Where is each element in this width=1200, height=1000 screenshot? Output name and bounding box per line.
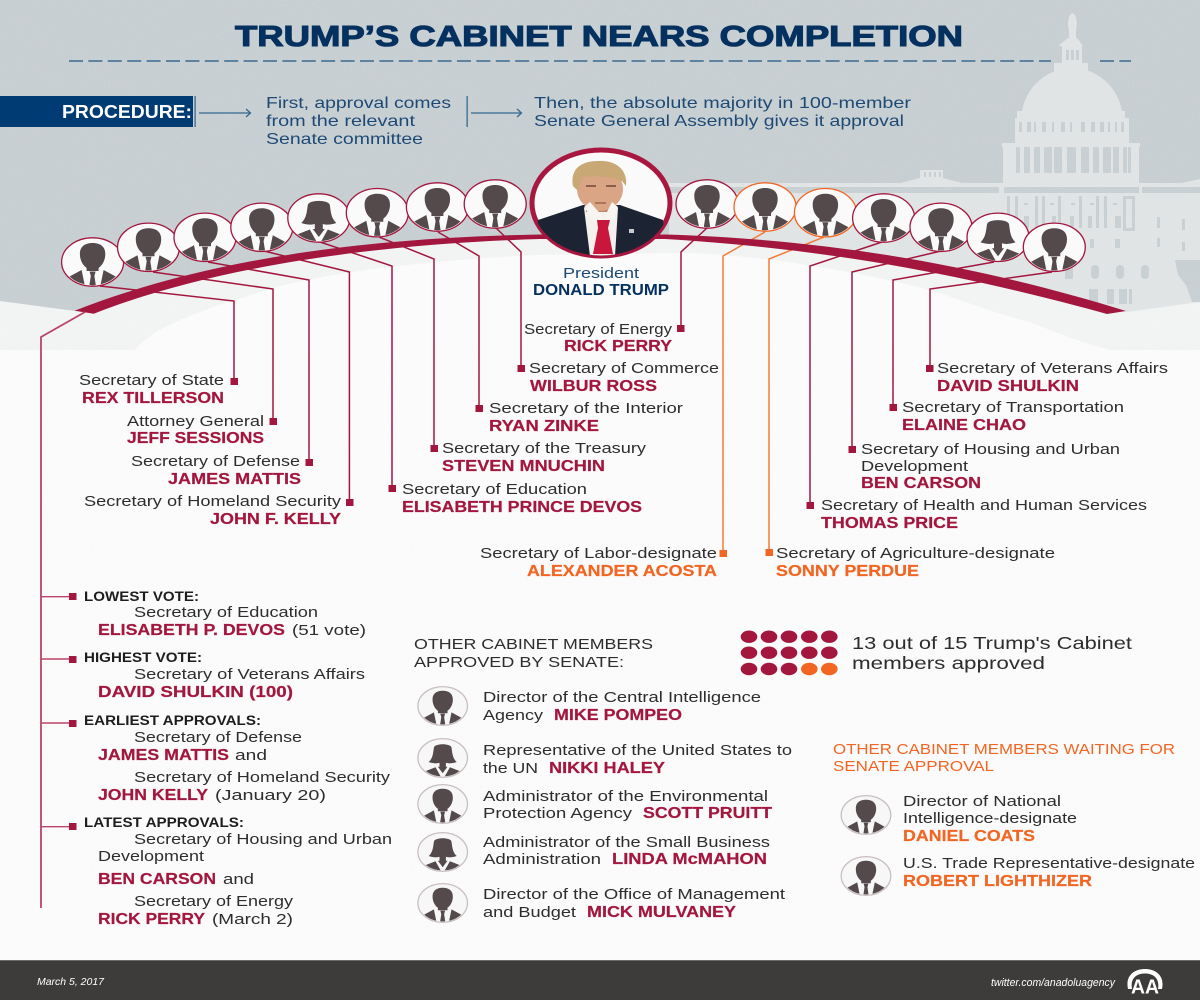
highlight: earliest approvals: (January 20) [215, 787, 326, 804]
label: Zinke: RYAN ZINKE [489, 418, 599, 435]
highlight: lowest vote: LOWEST VOTE: [84, 589, 199, 604]
highlight: latest approvals: Secretary of Energy [134, 893, 294, 910]
avatar: Sessions [116, 223, 180, 272]
president label: DONALD TRUMP [533, 282, 669, 299]
label: Price: Secretary of Health and Human Services [821, 497, 1147, 514]
avatar: Chao [966, 213, 1030, 262]
title: TRUMP’S CABINET NEARS COMPLETION [235, 21, 963, 53]
arc [75, 234, 1126, 314]
connector lines: left members [100, 228, 521, 502]
capitol building [669, 13, 1200, 313]
highlight: lowest vote: (51 vote) [292, 622, 366, 639]
highlight: earliest approvals: Secretary of Defense [134, 729, 302, 746]
member: Pompeo: Director of the Central Intelligence [483, 689, 761, 706]
heading: other approved members: APPROVED BY SENATE: [414, 654, 624, 671]
background: hill layers [0, 236, 1200, 1000]
text: first step [266, 95, 451, 148]
text: second step [534, 95, 912, 130]
label: Perry [524, 321, 684, 355]
label: Kelly [84, 493, 354, 528]
label: Ross: Secretary of Commerce [529, 360, 719, 377]
label: Chao [890, 399, 1124, 434]
member: Lighthizer: ROBERT LIGHTHIZER [903, 873, 1092, 890]
label: Perdue: Secretary of Agriculture-designate [776, 545, 1055, 562]
member: Mulvaney [417, 884, 786, 923]
label: Mattis: Secretary of Defense [131, 453, 300, 470]
member: McMahon: LINDA McMAHON [612, 851, 767, 868]
member: Pompeo: MIKE POMPEO [554, 707, 682, 724]
footer [0, 960, 1200, 1000]
member: Lighthizer [840, 855, 1195, 896]
label: Shulkin: DAVID SHULKIN [937, 378, 1079, 395]
text: approval count [852, 633, 1132, 673]
avatar: Zinke [405, 183, 469, 232]
highlight: earliest approvals: Secretary of Homeland Security [134, 769, 391, 786]
label: DeVos: ELISABETH PRINCE DEVOS [402, 499, 642, 516]
label: Carson: Secretary of Housing and Urban [861, 441, 1120, 458]
label: Ross: WILBUR ROSS [530, 378, 657, 395]
label: Shulkin: Secretary of Veterans Affairs [937, 360, 1168, 377]
avatar: Mnuchin [345, 188, 409, 238]
label: Sessions: JEFF SESSIONS [127, 430, 264, 447]
text: first step: First, approval comes [266, 95, 451, 112]
highlight: highest vote [84, 650, 365, 701]
label: DeVos [388, 481, 642, 516]
member: McMahon [417, 833, 770, 872]
label: Mattis: JAMES MATTIS [168, 471, 301, 488]
label: Shulkin [926, 360, 1168, 395]
label: Perry: RICK PERRY [564, 338, 673, 355]
avatar: Price [852, 194, 916, 243]
background: grain texture [0, 0, 1200, 340]
procedure banner [0, 96, 196, 127]
label: Sessions [127, 413, 277, 447]
highlight: latest approvals: Secretary of Housing and Urban [134, 831, 392, 848]
member: Lighthizer: U.S. Trade Representative-designate [903, 855, 1195, 872]
member: Haley: the UN [483, 760, 538, 777]
label: Kelly: JOHN F. KELLY [210, 511, 342, 528]
highlight: earliest approvals: JAMES MATTIS [98, 747, 229, 764]
highlight: highest vote: Secretary of Veterans Affairs [134, 666, 365, 683]
avatar: Carson [909, 203, 973, 252]
highlight: highest vote: DAVID SHULKIN (100) [98, 684, 293, 701]
highlight: latest approvals: and [223, 871, 254, 888]
member: McMahon: Administration [483, 851, 601, 868]
highlight: latest approvals: BEN CARSON [98, 871, 216, 888]
label: Price: THOMAS PRICE [821, 515, 958, 532]
member: Mulvaney: and Budget [483, 904, 577, 921]
label: Mnuchin: Secretary of the Treasury [442, 440, 647, 457]
avatars: right arc [675, 180, 1086, 272]
member: Pruitt: Administrator of the Environmental [483, 788, 768, 805]
avatar: Tillerson [61, 238, 125, 287]
avatars: left arc [61, 180, 527, 287]
procedure banner: PROCEDURE: [62, 102, 192, 122]
member: Coats: Director of National [903, 793, 1061, 810]
highlight: lowest vote [84, 589, 366, 639]
member: Coats: DANIEL COATS [903, 828, 1035, 845]
heading: waiting members: SENATE APPROVAL [833, 758, 994, 775]
label: Tillerson [79, 372, 238, 407]
label: Acosta: Secretary of Labor-designate [480, 545, 717, 562]
label: Acosta [480, 545, 727, 580]
heading: waiting members: OTHER CABINET MEMBERS WAITING FOR [833, 741, 1175, 758]
heading: other approved members: OTHER CABINET MEMBERS [414, 636, 653, 653]
arrow: procedure to first step [199, 109, 250, 117]
label: Tillerson: Secretary of State [79, 372, 224, 389]
member: Haley: NIKKI HALEY [549, 760, 666, 777]
member: Mulvaney: MICK MULVANEY [587, 904, 737, 921]
member: Pruitt [417, 785, 773, 824]
avatar: Shulkin [1022, 223, 1086, 272]
member: Coats [840, 793, 1077, 845]
member: Pruitt: Protection Agency [483, 805, 633, 822]
highlight: latest approvals: (March 2) [212, 911, 293, 928]
timeline line with highlight ticks [41, 312, 85, 908]
label: Carson [848, 441, 1120, 492]
dot chart: 13 of 15 approved [741, 630, 838, 675]
label: Zinke: Secretary of the Interior [489, 400, 683, 417]
highlight: earliest approvals: EARLIEST APPROVALS: [84, 713, 261, 728]
background: paper speckle [0, 340, 1200, 960]
label: Ross [518, 360, 719, 395]
label: Price [806, 497, 1147, 532]
label: Carson: BEN CARSON [861, 475, 981, 492]
date: March 5, 2017 [37, 976, 105, 988]
label: Chao: ELAINE CHAO [902, 417, 1026, 434]
avatar: Acosta [733, 183, 797, 232]
text: first step: Senate committee [266, 131, 423, 148]
avatar: Mattis [173, 213, 237, 262]
label: Sessions: Attorney General [127, 413, 264, 430]
label: Perdue [766, 545, 1055, 580]
highlight: latest approvals: RICK PERRY [98, 911, 206, 928]
member: Pompeo: Agency [483, 707, 544, 724]
label: Tillerson: REX TILLERSON [82, 390, 224, 407]
connector lines: right members [681, 228, 1052, 553]
text: approval count: members approved [852, 653, 1045, 673]
member: Pompeo [417, 687, 761, 726]
heading: waiting members [833, 741, 1175, 775]
label: Perdue: SONNY PERDUE [776, 563, 919, 580]
highlight: earliest approvals [84, 713, 391, 804]
arrow: first step to second step [471, 109, 522, 117]
label: Perry: Secretary of Energy [524, 321, 673, 338]
icon: agency logo: AA [1131, 976, 1159, 998]
highlight: highest vote: HIGHEST VOTE: [84, 650, 202, 665]
label: Chao: Secretary of Transportation [902, 399, 1124, 416]
icon: agency logo [1127, 969, 1163, 998]
twitter handle: twitter.com/anadoluagency [991, 977, 1116, 989]
text: first step: from the relevant [266, 113, 416, 130]
highlight: latest approvals: LATEST APPROVALS: [84, 815, 244, 830]
label: DeVos: Secretary of Education [402, 481, 587, 498]
label: Mnuchin: STEVEN MNUCHIN [442, 458, 605, 475]
member: Haley [417, 739, 792, 778]
avatar: Perry [675, 180, 739, 229]
highlight: latest approvals [84, 815, 392, 928]
heading: other approved members [414, 636, 653, 671]
text: second step: Senate General Assembly gives it approval [534, 113, 904, 130]
highlight: earliest approvals: JOHN KELLY [98, 787, 209, 804]
member: Haley: Representative of the United States to [483, 742, 792, 759]
label: Mattis [131, 453, 313, 488]
avatar: Perdue [793, 188, 857, 238]
member: Coats: Intelligence-designate [903, 810, 1077, 827]
president label: President [563, 265, 640, 282]
highlight: lowest vote: Secretary of Education [134, 604, 318, 621]
member: Pruitt: SCOTT PRUITT [643, 805, 773, 822]
highlight: lowest vote: ELISABETH P. DEVOS [98, 622, 285, 639]
text: approval count: 13 out of 15 Trump's Cabinet [852, 633, 1132, 653]
highlight: latest approvals: Development [98, 848, 205, 865]
highlight: earliest approvals: and [235, 747, 267, 764]
label: Zinke [476, 400, 683, 435]
avatar: Ross [463, 180, 527, 229]
label: Acosta: ALEXANDER ACOSTA [527, 563, 717, 580]
member: McMahon: Administrator of the Small Business [483, 834, 770, 851]
label: Kelly: Secretary of Homeland Security [84, 493, 342, 510]
president label [533, 265, 669, 299]
label: Carson: Development [861, 458, 969, 475]
label: Mnuchin [430, 440, 647, 475]
text: second step: Then, the absolute majority in 100-member [534, 95, 912, 112]
president portrait [532, 150, 670, 262]
member: Mulvaney: Director of the Office of Management [483, 886, 786, 903]
avatar: DeVos [287, 194, 351, 243]
avatar: Kelly [230, 203, 294, 252]
